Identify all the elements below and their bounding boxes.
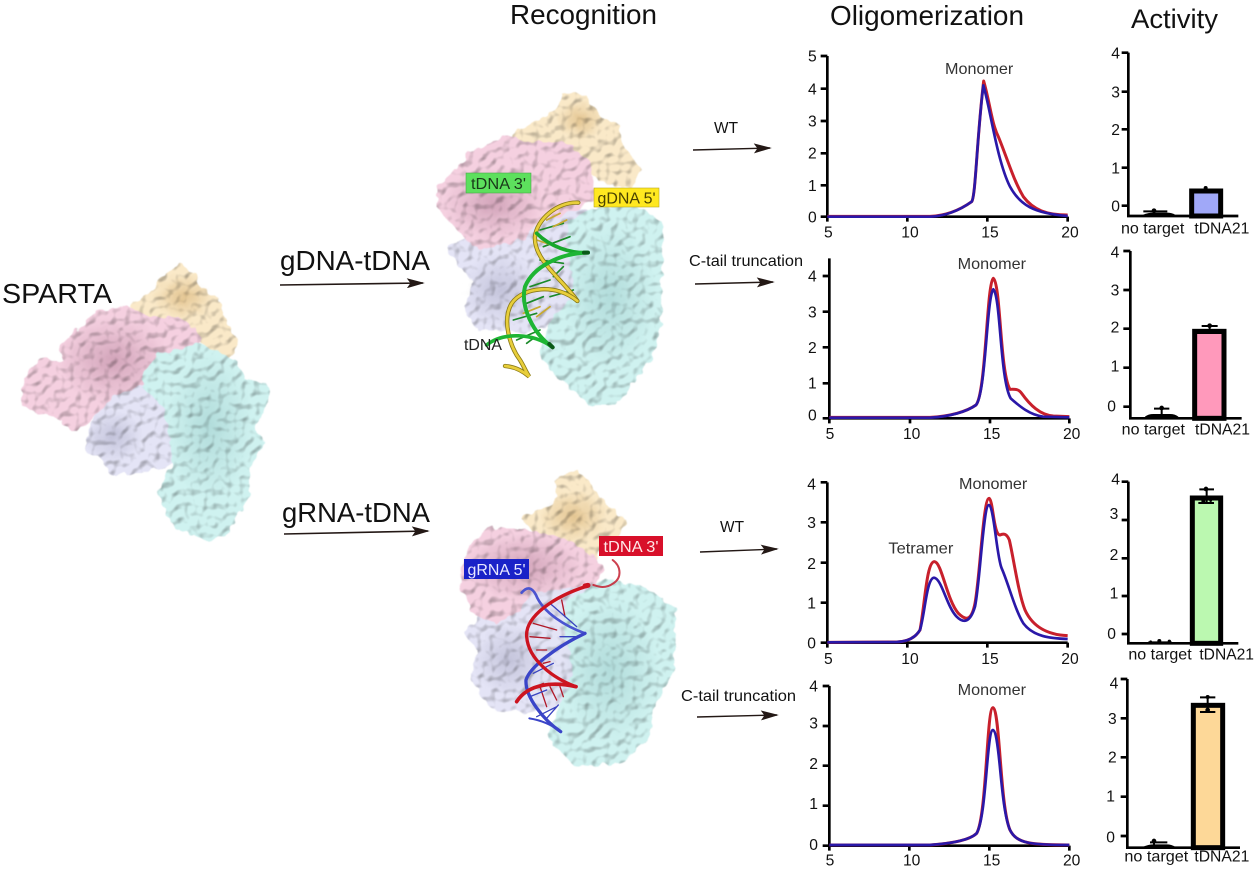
bar chart: gDNA C-tail truncation activity: 3 (1111, 283, 1120, 300)
label: WT (gDNA): WT (714, 120, 739, 137)
chart: gRNA C-tail truncation oligomerization: 4 (809, 679, 818, 696)
chart: gRNA WT oligomerization: 15 (981, 651, 999, 668)
chart: gRNA WT oligomerization: 4 (807, 477, 816, 494)
yellow gDNA strand (535, 203, 578, 301)
label: tDNA strand: tDNA (464, 337, 502, 354)
label: SPARTA: SPARTA (2, 278, 112, 309)
rungs (513, 213, 573, 343)
chart: gDNA C-tail truncation oligomerization: 3 (808, 304, 817, 321)
bar chart: gRNA C-tail truncation activity: 1 (1106, 789, 1115, 806)
chart: gDNA C-tail truncation oligomerization: 2 (808, 340, 817, 357)
chart: gDNA WT oligomerization (808, 49, 1079, 241)
chart: gRNA C-tail truncation oligomerization (809, 679, 1081, 870)
protein structure: gDNA-tDNA complex surface (440, 97, 660, 403)
bar chart: gRNA C-tail truncation activity (1106, 675, 1249, 866)
blue gRNA strand (522, 588, 585, 633)
bar: tDNA21 (1192, 191, 1221, 216)
chart: gDNA C-tail truncation oligomerization: 15 (983, 426, 1001, 443)
chart: gRNA WT oligomerization: 3 (807, 515, 816, 532)
chart: gDNA C-tail truncation oligomerization: 0 (808, 408, 817, 425)
heading: Oligomerization: Oligomerization (830, 0, 1024, 31)
bar chart: gRNA WT activity (1107, 472, 1254, 663)
bar chart: gRNA WT activity: 2 (1110, 547, 1118, 564)
bar: tDNA21 (1192, 498, 1221, 643)
bar chart: gRNA WT activity: 1 (1110, 585, 1118, 602)
red tDNA strand (527, 586, 587, 687)
bar chart: gRNA C-tail truncation activity: tDNA21 (1194, 849, 1249, 866)
bar chart: gDNA C-tail truncation activity: 4 (1111, 244, 1120, 261)
chart: gDNA WT oligomerization: 5 (824, 224, 833, 241)
chart: gDNA WT oligomerization: 10 (901, 224, 919, 241)
bar chart: gRNA C-tail truncation activity: 2 (1108, 749, 1117, 766)
chart: gRNA C-tail truncation oligomerization: 2 (809, 756, 818, 773)
chart: gDNA C-tail truncation oligomerization (808, 256, 1081, 443)
label: C-tail truncation (gDNA): C-tail truncation (689, 253, 803, 270)
chart: gDNA WT oligomerization: 2 (808, 146, 817, 163)
chart: gRNA WT oligomerization (807, 476, 1079, 668)
chart: gRNA C-tail truncation oligomerization: 0 (809, 837, 818, 854)
bar chart: gDNA C-tail truncation activity: 1 (1111, 359, 1119, 376)
bar chart: gRNA C-tail truncation activity: no target (1124, 849, 1189, 866)
chart: gDNA WT oligomerization: 4 (808, 81, 817, 98)
chart: gDNA C-tail truncation oligomerization: 20 (1063, 426, 1081, 443)
bar chart: gRNA WT activity: tDNA21 (1199, 646, 1254, 663)
bar chart: gDNA WT activity: tDNA21 (1194, 220, 1249, 237)
chart: gRNA WT oligomerization: 2 (807, 556, 816, 573)
bar chart: gRNA WT activity: 4 (1111, 472, 1120, 489)
arrow: WT gDNA (693, 148, 770, 150)
chart: gDNA C-tail truncation oligomerization: 4 (808, 269, 817, 286)
arrow: SPARTA to gDNA-tDNA complex (280, 283, 423, 285)
chart: gRNA WT oligomerization: Tetramer (888, 540, 953, 557)
chart: gRNA WT oligomerization: Monomer (959, 476, 1027, 493)
bar chart: gDNA C-tail truncation activity (1107, 244, 1250, 438)
heading: Activity: Activity (1131, 4, 1219, 34)
bar chart: gDNA C-tail truncation activity: tDNA21 (1195, 421, 1250, 438)
bar chart: gRNA C-tail truncation activity: 4 (1110, 675, 1119, 692)
chart: gRNA WT oligomerization: 20 (1061, 651, 1079, 668)
label: C-tail truncation (gRNA): C-tail truncation (681, 688, 796, 705)
arrow: C-tail gDNA (695, 282, 773, 284)
bar chart: gDNA C-tail truncation activity: 0 (1107, 399, 1116, 416)
bar chart: gDNA WT activity: 4 (1111, 45, 1120, 62)
bar chart: gDNA WT activity: 3 (1111, 84, 1120, 101)
bar chart: gDNA C-tail truncation activity: no target (1122, 421, 1186, 438)
chart: gRNA WT oligomerization: 0 (807, 635, 816, 652)
bar: no target (1145, 414, 1178, 418)
chart: gRNA C-tail truncation oligomerization: Monomer (958, 682, 1026, 699)
chart: gRNA C-tail truncation oligomerization: 5 (826, 853, 835, 870)
bar chart: gRNA WT activity: 0 (1107, 626, 1116, 643)
bar chart: gDNA WT activity (1111, 45, 1249, 237)
rungs (527, 600, 580, 718)
chart: gRNA C-tail truncation oligomerization: 10 (903, 853, 921, 870)
chart: gDNA C-tail truncation oligomerization: 5 (826, 426, 835, 443)
label: gDNA-tDNA: gDNA-tDNA (280, 245, 430, 276)
chart: gDNA C-tail truncation oligomerization: Monomer (958, 256, 1026, 273)
bar chart: gDNA WT activity: 1 (1111, 160, 1120, 177)
arrow: C-tail gRNA (697, 715, 777, 717)
chart: gDNA C-tail truncation oligomerization: 1 (808, 376, 817, 393)
chart: gDNA WT oligomerization: 15 (981, 224, 999, 241)
chart: gDNA WT oligomerization: 20 (1061, 224, 1079, 241)
label box: tDNA 3' (red): tDNA 3' (604, 539, 658, 556)
bar chart: gRNA C-tail truncation activity: 0 (1106, 829, 1115, 846)
bar chart: gDNA WT activity: no target (1121, 220, 1185, 237)
arrow: SPARTA to gRNA-tDNA complex (284, 531, 428, 534)
bar chart: gDNA WT activity: 2 (1111, 122, 1120, 139)
chart: gDNA C-tail truncation oligomerization: 10 (903, 426, 921, 443)
chart: gRNA WT oligomerization: 5 (824, 651, 833, 668)
label: gRNA-tDNA: gRNA-tDNA (282, 497, 430, 528)
bar: tDNA21 (1193, 705, 1223, 848)
protein structure: SPARTA apo surface (23, 267, 267, 538)
bar chart: gRNA WT activity: no target (1128, 646, 1192, 663)
chart: gDNA WT oligomerization: 3 (808, 114, 817, 131)
label: WT (gRNA): WT (720, 519, 745, 536)
bar: no target (1148, 641, 1172, 644)
chart: gDNA WT oligomerization: Monomer (945, 61, 1013, 78)
bar chart: gRNA C-tail truncation activity: 3 (1108, 711, 1117, 728)
bar chart: gDNA WT activity: 0 (1111, 198, 1120, 215)
chart: gDNA WT oligomerization: 0 (808, 209, 817, 226)
nucleic acid: gDNA-tDNA duplex (487, 203, 588, 377)
chart: gRNA C-tail truncation oligomerization: 1 (809, 796, 818, 813)
chart: gDNA WT oligomerization: 5 (808, 49, 817, 66)
label box: gDNA 5': gDNA 5' (598, 190, 656, 208)
chart: gDNA WT oligomerization: 1 (808, 178, 817, 195)
chart: gRNA C-tail truncation oligomerization: 3 (809, 715, 818, 732)
bar: no target (1143, 844, 1175, 848)
bar: no target (1143, 213, 1175, 216)
green tDNA strand (537, 233, 587, 253)
nucleic acid: gRNA-tDNA duplex (517, 560, 620, 732)
label box: tDNA 3': tDNA 3' (471, 176, 526, 193)
arrow: WT gRNA (700, 549, 777, 552)
chart: gRNA WT oligomerization: 1 (807, 595, 816, 612)
bar chart: gDNA C-tail truncation activity: 2 (1111, 319, 1119, 336)
chart: gRNA WT oligomerization: 10 (901, 651, 919, 668)
chart: gRNA C-tail truncation oligomerization: 15 (983, 853, 1001, 870)
bar chart: gRNA WT activity: 3 (1110, 506, 1119, 523)
label box: gRNA 5': gRNA 5' (468, 562, 526, 579)
bar: tDNA21 (1195, 331, 1224, 418)
protein structure: gRNA-tDNA complex surface (462, 473, 673, 763)
chart: gRNA C-tail truncation oligomerization: 20 (1063, 853, 1081, 870)
